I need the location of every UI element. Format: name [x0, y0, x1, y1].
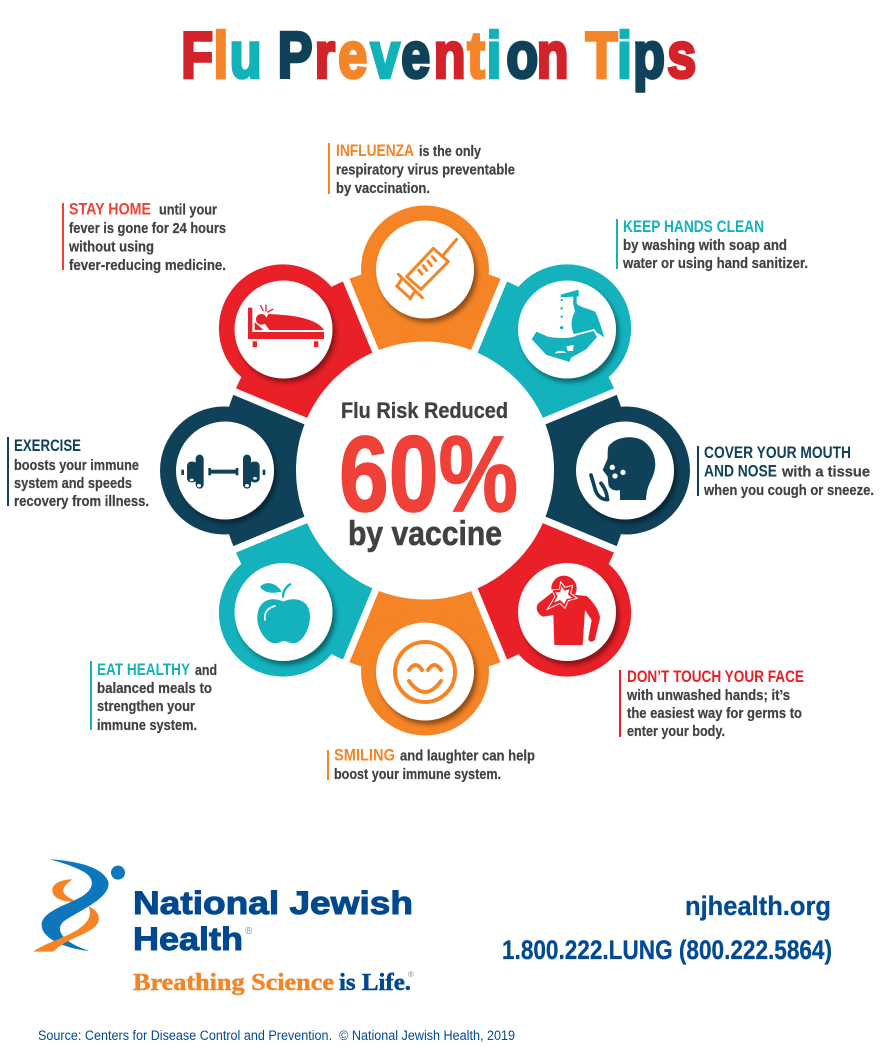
logo: National Jewish Health: Health [133, 921, 243, 957]
text: eat healthy: and [195, 663, 217, 679]
logo: National Jewish Health: ® [408, 970, 414, 979]
text: keep hands clean: water or using hand sanitizer. [622, 256, 808, 272]
segment: smiling (orange) [349, 591, 501, 736]
text: eat healthy: strengthen your [97, 699, 195, 715]
text: keep hands clean: by washing with soap and [623, 238, 787, 254]
icon: smiley face [395, 642, 455, 702]
text: exercise [7, 437, 149, 510]
segment: keep hands clean (teal) [457, 230, 666, 439]
text: don't touch your face [619, 668, 804, 740]
text: keep hands clean [616, 218, 808, 272]
icon: person touching face [537, 576, 600, 645]
text: cover your mouth: with a tissue [781, 464, 870, 480]
logo: National Jewish Health: Breathing Science [133, 970, 334, 996]
text: smiling [327, 746, 535, 783]
title: p [633, 20, 665, 92]
text: don't touch your face: enter your body. [627, 724, 725, 740]
text: cover your mouth: COVER YOUR MOUTH [704, 444, 851, 462]
icon: apple [257, 583, 310, 643]
logo: National Jewish Health: is Life. [339, 970, 411, 996]
icon: dumbbell [181, 455, 265, 489]
icon: person in bed [248, 305, 324, 347]
title: e [401, 20, 430, 92]
segment: eat healthy (teal) [184, 502, 393, 711]
text: stay home: STAY HOME [69, 200, 151, 218]
text: influenza: by vaccination. [336, 181, 430, 197]
title: v [371, 20, 400, 92]
text: exercise: EXERCISE [14, 437, 81, 455]
text: smiling: SMILING [334, 746, 395, 764]
text: eat healthy: immune system. [97, 718, 197, 734]
logo: National Jewish Health: ® [245, 926, 253, 937]
logo: National Jewish Health: National Jewish [133, 885, 413, 921]
title [181, 20, 696, 92]
title: r [315, 20, 335, 92]
text: eat healthy: balanced meals to [97, 681, 212, 697]
icon: coughing head [591, 437, 655, 500]
text: cover your mouth [697, 444, 874, 499]
center message [339, 398, 518, 553]
text: influenza [328, 142, 515, 197]
title: e [338, 20, 367, 92]
text: influenza: is the only [419, 144, 481, 160]
text: exercise: boosts your immune [14, 458, 139, 474]
text: stay home: without using [68, 240, 154, 256]
title: s [667, 20, 696, 92]
contact: website and phone: njhealth.org [685, 891, 831, 921]
text: smiling: and laughter can help [400, 748, 535, 764]
segment: cover mouth (navy) [546, 395, 690, 546]
text: cover your mouth: when you cough or sneeze. [703, 483, 874, 499]
center message: by vaccine [348, 515, 502, 553]
text: eat healthy: EAT HEALTHY [97, 661, 190, 679]
text: exercise: system and speeds [14, 476, 132, 492]
text: stay home: fever is gone for 24 hours [69, 221, 226, 237]
title: F [181, 20, 213, 92]
title: T [586, 20, 617, 92]
logo mark: helix [33, 859, 125, 952]
icon: soap and hands [531, 290, 604, 363]
text: stay home: fever-reducing medicine. [69, 258, 226, 274]
text: cover your mouth: AND NOSE [704, 462, 777, 480]
title: P [278, 20, 312, 92]
text: exercise: recovery from illness. [14, 494, 149, 510]
source line: Source: Centers for Disease Control and Prevention. © National Jewish Health, 2019 [38, 1028, 515, 1043]
logo: National Jewish Health [33, 859, 414, 996]
segment: vaccination (orange) [349, 206, 501, 350]
text: eat healthy [90, 661, 217, 734]
segment: exercise (navy) [160, 395, 304, 546]
text: don't touch your face: with unwashed hands; it’s [626, 688, 790, 704]
center message: Flu Risk Reduced [341, 398, 508, 423]
segment: stay home (red) [184, 230, 393, 439]
title: n [537, 20, 569, 92]
text: don't touch your face: the easiest way for germs to [627, 706, 802, 722]
text: influenza: INFLUENZA [336, 142, 414, 160]
title: u [230, 20, 262, 92]
center message: 60% [339, 413, 518, 534]
text: keep hands clean: KEEP HANDS CLEAN [623, 218, 764, 236]
title: l [214, 20, 228, 92]
text: influenza: respiratory virus preventable [336, 162, 515, 178]
contact: website and phone: 1.800.222.LUNG (800.222.5864) [502, 935, 832, 965]
title: t [467, 20, 485, 92]
title: n [434, 20, 466, 92]
title: i [617, 20, 632, 92]
text: stay home: until your [159, 202, 217, 218]
icon: syringe [397, 239, 457, 299]
text: smiling: boost your immune system. [334, 767, 501, 783]
title: o [506, 20, 538, 92]
text: stay home [62, 200, 226, 274]
title: i [487, 20, 501, 92]
text: don't touch your face: DON’T TOUCH YOUR FACE [627, 668, 804, 686]
contact: website and phone [502, 891, 832, 965]
segment: don't touch face (red) [457, 502, 666, 711]
